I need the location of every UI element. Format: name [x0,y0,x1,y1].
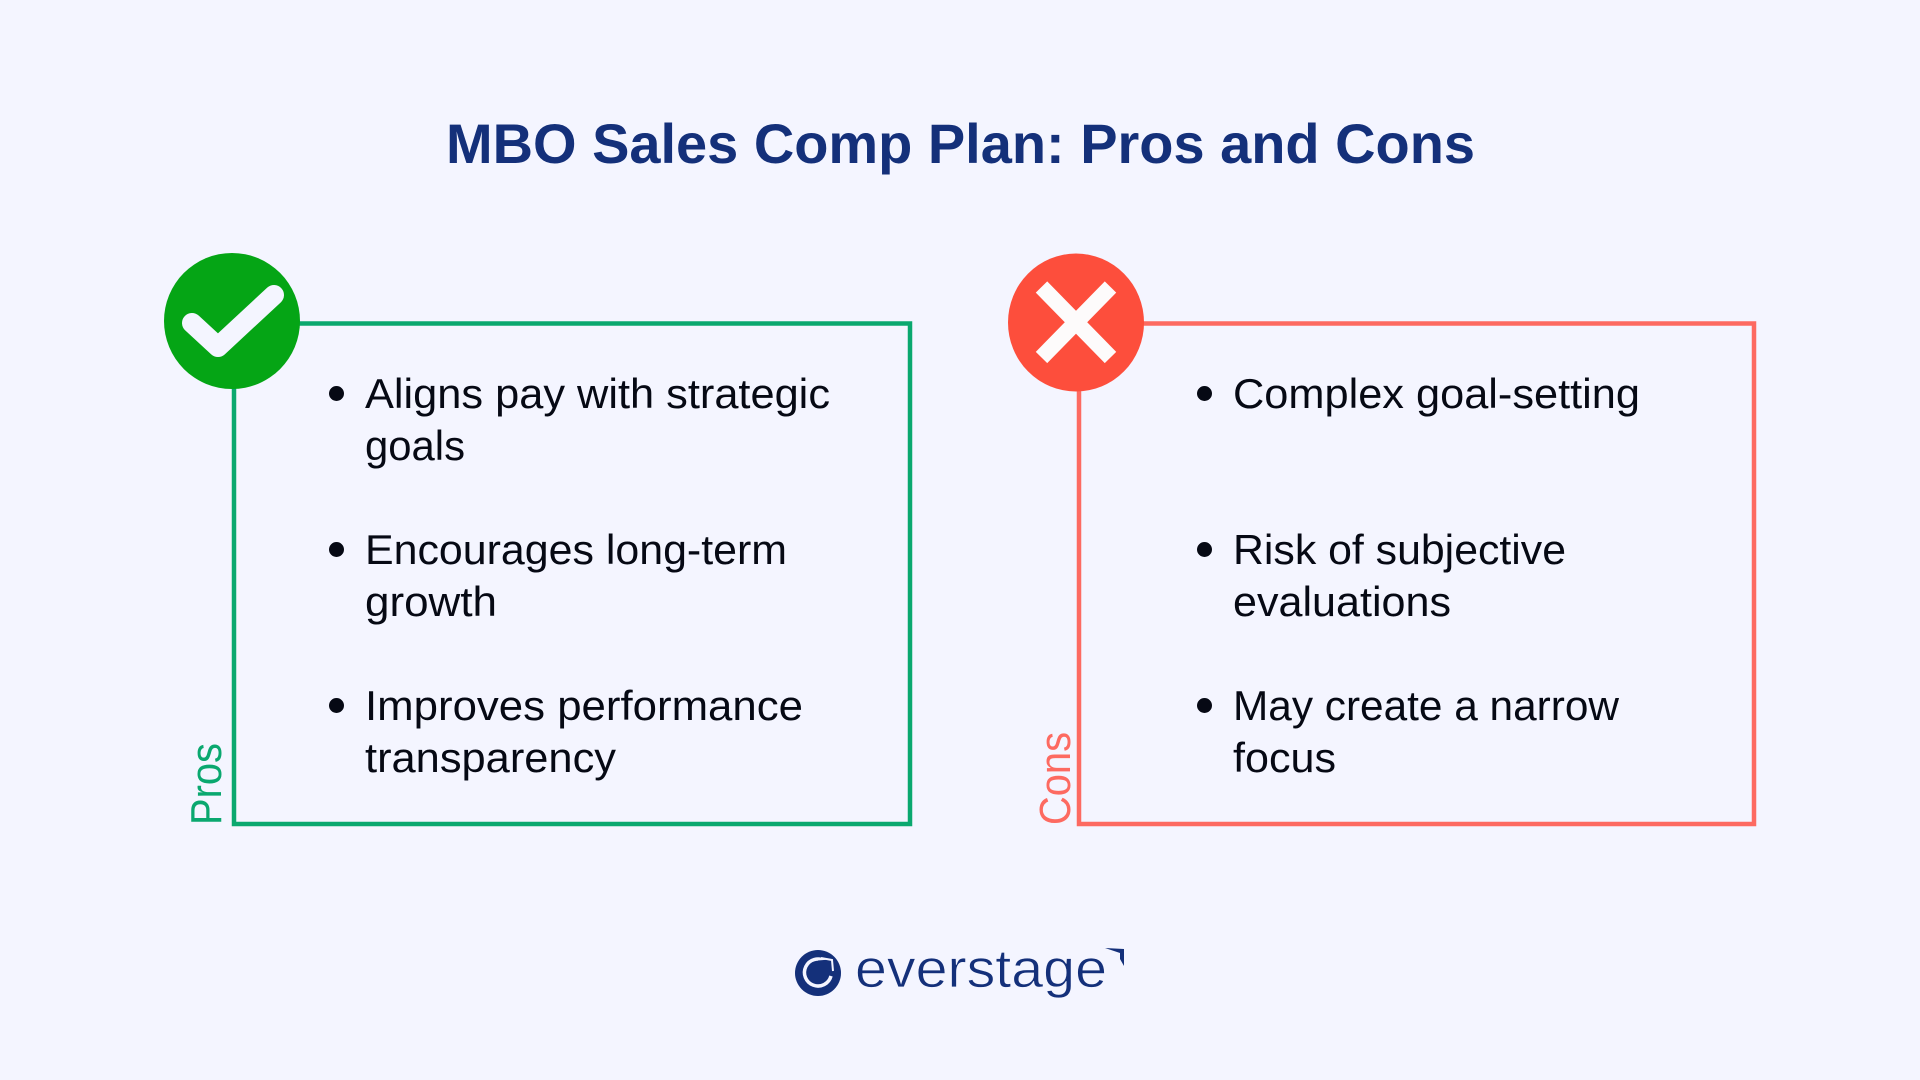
cons vertical label: Cons [1031,732,1080,825]
pros item 2 [329,526,787,625]
cons item 2: Risk of subjective [1233,526,1566,573]
pros item 3: transparency [365,734,616,781]
pros vertical label: Pros [182,743,231,825]
cons item 2: evaluations [1233,578,1451,625]
panel: pros [164,253,910,825]
pros item 1: Aligns pay with strategic [365,370,830,417]
logo: everstage [795,939,1124,999]
cons box outline [1079,324,1754,824]
cons item 3 [1197,682,1620,781]
cons item 3: May create a narrow [1233,682,1620,729]
pros item 3: Improves performance [365,682,803,729]
pros item 3 [329,682,803,781]
icon: green check [164,253,300,389]
icon: red cross [1008,254,1144,392]
panel: cons [1008,254,1754,825]
pros box outline [234,324,910,824]
logo bracket accent [1105,948,1124,966]
cons item 1: Complex goal-setting [1233,370,1640,417]
pros item 2: growth [365,578,497,625]
pros item 1: goals [365,422,465,469]
logo wordmark: everstage [855,939,1107,999]
icon: logo mark [795,950,841,996]
pros item 2: Encourages long-term [365,526,787,573]
cons item 2 [1197,526,1566,625]
pros item 1 [329,370,830,469]
cons item 3: focus [1233,734,1336,781]
title: MBO Sales Comp Plan: Pros and Cons [446,112,1475,175]
